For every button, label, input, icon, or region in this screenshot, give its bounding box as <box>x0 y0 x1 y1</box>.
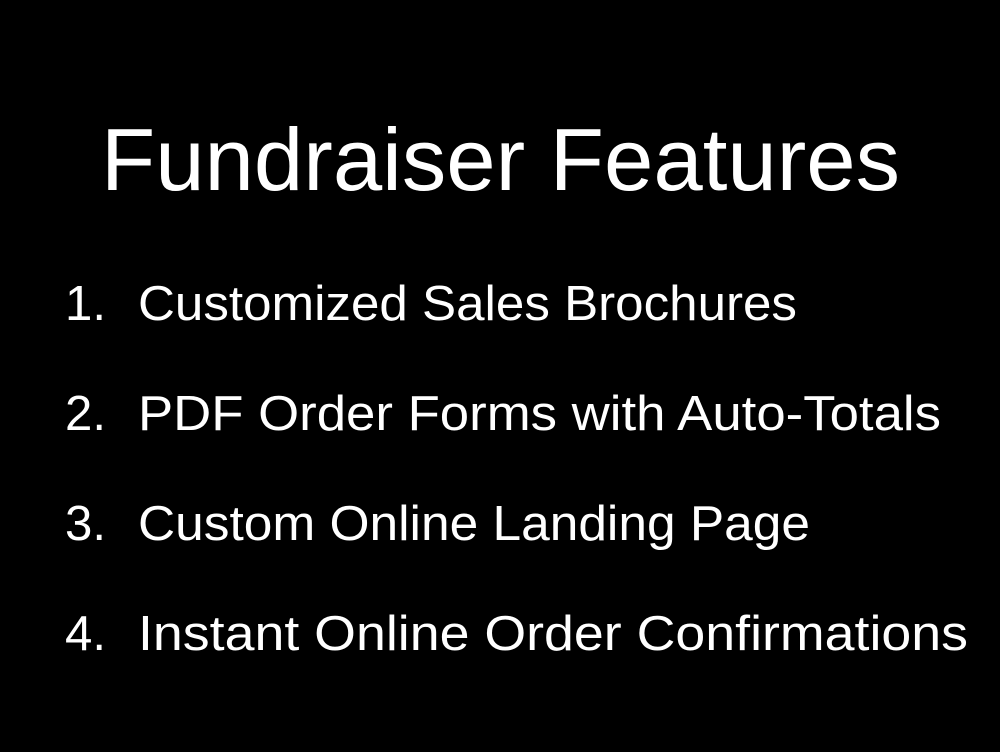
list item 2: 2. <box>65 387 106 441</box>
list item 4: 4. <box>65 607 106 661</box>
list item 2: PDF Order Forms with Auto-Totals <box>138 387 941 441</box>
feature list <box>65 277 968 661</box>
list item 3: 3. <box>65 497 106 551</box>
list item 1: 1. <box>65 277 106 331</box>
list item 1: Customized Sales Brochures <box>138 277 797 331</box>
list item 4: Instant Online Order Confirmations <box>138 607 968 661</box>
list item 3: Custom Online Landing Page <box>138 497 810 551</box>
title: Fundraiser Features <box>101 110 900 209</box>
